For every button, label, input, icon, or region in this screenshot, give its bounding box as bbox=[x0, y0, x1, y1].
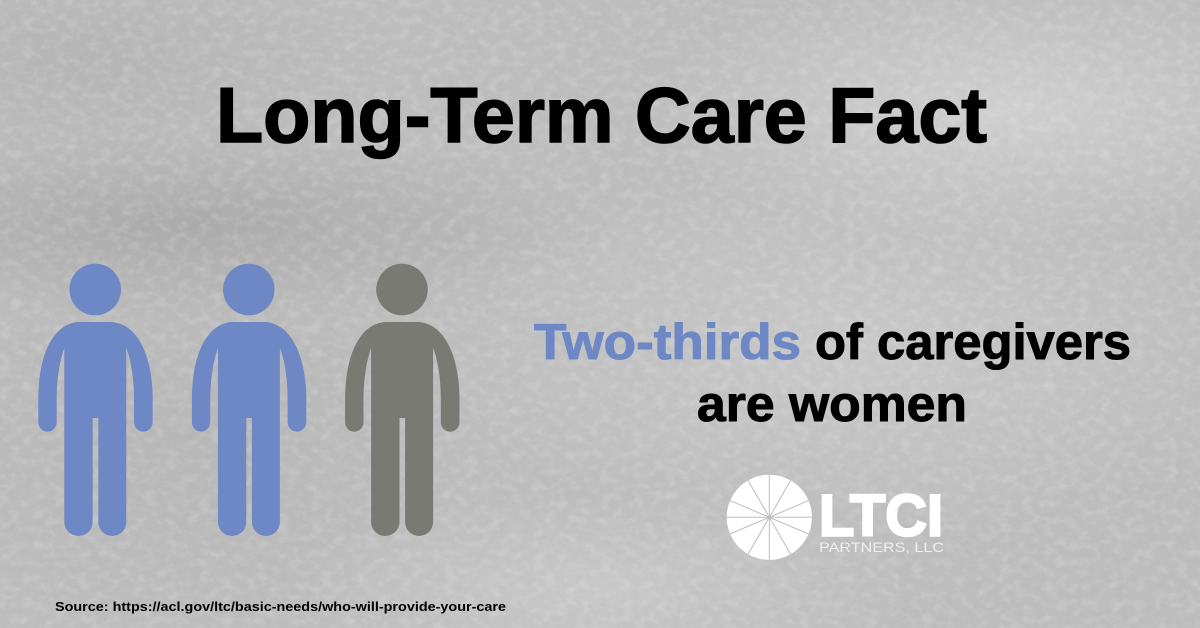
fact statement bbox=[534, 314, 1131, 432]
logo: LTCI Partners: LTCI bbox=[819, 484, 943, 548]
source citation: Source: https://acl.gov/ltc/basic-needs/who-will-provide-your-care bbox=[55, 599, 506, 614]
icon: woman caregiver figure 2 (blue) bbox=[192, 264, 306, 536]
title: Long-Term Care Fact bbox=[216, 71, 987, 159]
fact statement: of caregivers bbox=[815, 314, 1131, 370]
fact statement: are women bbox=[697, 376, 967, 432]
icon: other caregiver figure (grey) bbox=[345, 264, 460, 536]
fact statement: Two-thirds bbox=[534, 314, 801, 370]
icon: woman caregiver figure 1 (blue) bbox=[38, 264, 153, 536]
logo: LTCI Partners bbox=[727, 475, 944, 560]
logo: LTCI Partners: PARTNERS, LLC bbox=[819, 539, 944, 555]
